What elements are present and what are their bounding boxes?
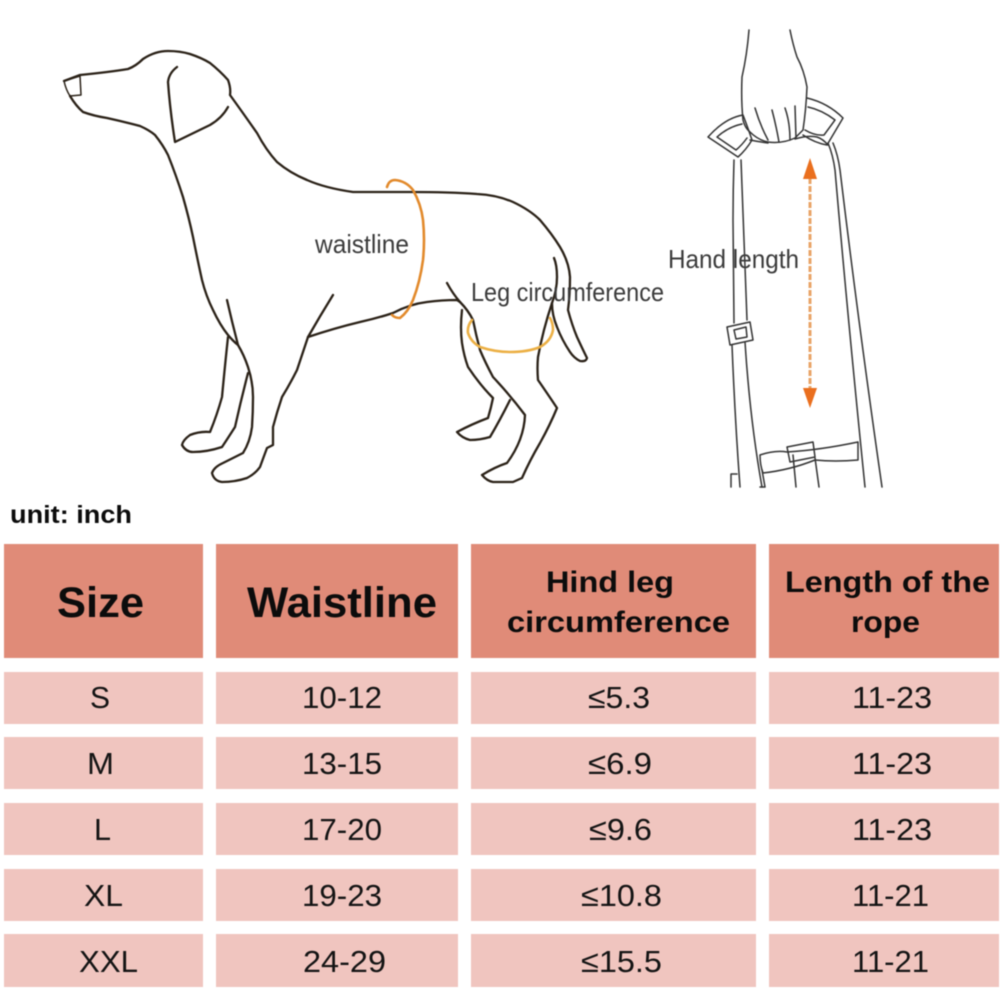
- hand and handle: [708, 30, 843, 157]
- row XXL: 11-21: [852, 944, 929, 979]
- row S: S: [90, 680, 110, 715]
- header row: Waistline: [247, 579, 437, 627]
- label: leg circumference: Leg circumference: [471, 277, 664, 307]
- unit note: unit: inch: [10, 501, 132, 529]
- row M: ≤6.9: [588, 746, 652, 781]
- size table: [4, 544, 999, 987]
- row XL: ≤10.8: [581, 878, 662, 913]
- strap lines and buckle: [727, 143, 882, 487]
- header row: Length of the: [785, 566, 990, 599]
- row M: 11-23: [852, 746, 932, 781]
- header row: [4, 544, 999, 658]
- header row: Size: [57, 579, 144, 627]
- dog outline: [64, 51, 587, 482]
- leg measure loop: [468, 318, 553, 352]
- row XL: XL: [84, 878, 123, 913]
- row XXL: 24-29: [303, 944, 386, 979]
- row M: M: [87, 746, 114, 781]
- row XXL: [4, 934, 999, 987]
- row XXL: XXL: [79, 944, 138, 979]
- row L: [4, 803, 999, 855]
- row S: 11-23: [852, 680, 932, 715]
- label: waistline: waistline: [314, 229, 409, 259]
- row XXL: ≤15.5: [581, 944, 662, 979]
- row L: L: [94, 812, 111, 847]
- row M: 13-15: [302, 746, 382, 781]
- row S: [4, 672, 999, 724]
- row S: 10-12: [302, 680, 382, 715]
- row L: ≤9.6: [589, 812, 652, 847]
- row S: ≤5.3: [588, 680, 650, 715]
- header row: rope: [851, 606, 920, 639]
- header row: circumference: [507, 606, 730, 639]
- waist measure loop: [387, 180, 424, 318]
- row L: 17-20: [302, 812, 382, 847]
- label: hand length: Hand length: [668, 244, 799, 274]
- row XL: 19-23: [302, 878, 382, 913]
- row XL: 11-21: [852, 878, 929, 913]
- hand strap diagram: [668, 30, 882, 487]
- row M: [4, 737, 999, 789]
- header row: Hind leg: [546, 566, 674, 599]
- dog measurement diagram: [64, 51, 664, 482]
- row L: 11-23: [852, 812, 932, 847]
- orange double arrow: [803, 158, 817, 408]
- row XL: [4, 869, 999, 921]
